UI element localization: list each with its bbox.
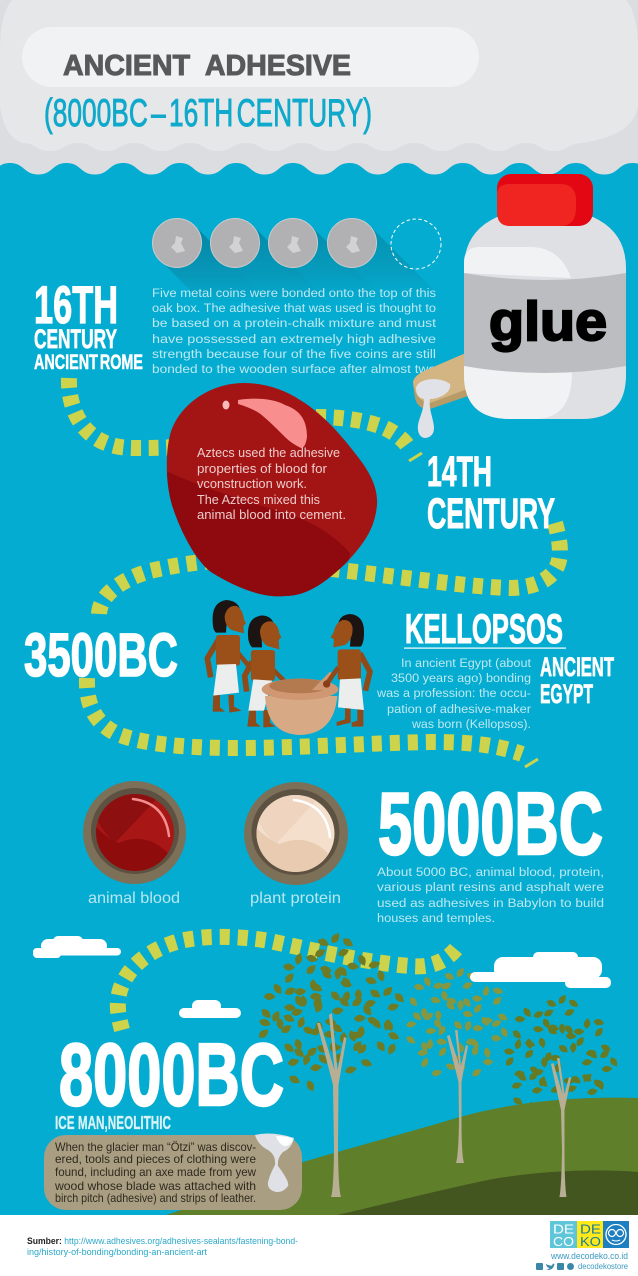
Kellopsos text: 3500 years ago) bonding: [391, 671, 531, 685]
blood text: vconstruction work.: [197, 477, 307, 491]
coin long shadows: [160, 226, 440, 303]
5000BC text: various plant resins and asphalt were: [377, 880, 604, 894]
Kellopsos text: was born (Kellopsos).: [411, 717, 531, 731]
blood drop: [160, 380, 385, 602]
Ice man sub-heading: ICE MAN,NEOLITHIC: [55, 1113, 171, 1133]
Ice man text box: found, including an axe made from yew: [55, 1166, 257, 1179]
Deco Deko logo: KO: [580, 1234, 601, 1249]
blood text: [197, 446, 346, 522]
subtitle: (8000BC – 16TH CENTURY): [44, 92, 372, 135]
glue drip in text box: [255, 1134, 294, 1192]
Ice man text box: When the glacier man “Ötzi” was discov-: [55, 1141, 256, 1154]
coins: [152, 218, 376, 268]
plant protein label: plant protein: [250, 890, 341, 907]
social handle: decodekostore: [578, 1261, 628, 1271]
mortar bowl: [262, 667, 338, 735]
Ice man text box: [44, 1135, 302, 1210]
Kellopsos text: In ancient Egypt (about: [401, 656, 532, 670]
5000BC text: About 5000 BC, animal blood, protein,: [377, 865, 604, 879]
timeline dash tips: [409, 453, 538, 767]
blood text: The Aztecs mixed this: [197, 493, 320, 507]
glue bottle: [464, 174, 626, 419]
timeline dashes: [69, 378, 560, 1030]
14th century heading: CENTURY: [427, 490, 555, 538]
Egyptian adhesive makers: [207, 600, 370, 735]
Deco Deko logo: DE: [580, 1222, 601, 1236]
figure: right: [331, 614, 370, 727]
blood text: Aztecs used the adhesive: [197, 446, 340, 460]
cloud: right: [470, 952, 611, 988]
coins text: [152, 286, 437, 376]
5000BC text: houses and temples.: [377, 911, 495, 925]
social icons: [536, 1263, 574, 1270]
coins text: bonded to the wooden surface after almost two: [152, 362, 436, 376]
coins text: strength because four of the five coins are still: [152, 347, 436, 361]
hills: [163, 1098, 638, 1216]
coins text: oak box. The adhesive that was used is thought to: [152, 301, 436, 315]
tree foliage: left: [251, 931, 408, 1096]
14th century heading: 14TH: [427, 448, 492, 496]
header band: [0, 0, 638, 174]
16th century heading: ANCIENT ROME: [34, 351, 143, 374]
source: ing/history-of-bonding/bonding-an-ancient-art: [27, 1246, 207, 1257]
Ice man text box: wood whose blade was attached with: [54, 1180, 256, 1193]
footer: [0, 1215, 638, 1276]
5000BC text: [377, 865, 604, 925]
coins text: be based on a protein-chalk mixture and must: [152, 316, 437, 330]
source: [27, 1235, 298, 1257]
Kellopsos text: was a profession: the occu-: [376, 686, 531, 700]
Ice man text box: ered, tools and pieces of clothing were: [55, 1153, 256, 1166]
tree trunks: [317, 1013, 571, 1197]
Ancient Egypt label: [540, 652, 614, 709]
Deco Deko logo: [550, 1221, 629, 1249]
16th century heading: CENTURY: [34, 324, 117, 354]
tree foliage: right: [497, 993, 623, 1117]
figure: middle: [245, 615, 284, 727]
3500BC heading: 3500BC: [24, 621, 178, 689]
8000BC heading: 8000BC: [59, 1025, 284, 1124]
cloud: left: [33, 936, 121, 958]
coins text: Five metal coins were bonded onto the top of this: [152, 286, 436, 300]
Ice man text box: birch pitch (adhesive) and strips of leather.: [55, 1192, 256, 1205]
Deco Deko logo: DE: [553, 1222, 574, 1236]
tree foliage: middle: [397, 966, 515, 1086]
spatula with glue: [413, 352, 480, 438]
animal blood label: animal blood: [88, 890, 180, 907]
figure: left: [207, 600, 252, 713]
Deco Deko logo: CO: [553, 1234, 574, 1249]
clouds: [33, 936, 611, 1018]
Ancient Egypt label: EGYPT: [540, 679, 593, 709]
16th century heading: 16TH: [34, 276, 118, 335]
Kellopsos text: pation of adhesive-maker: [387, 702, 531, 716]
coins text: have possessed an extremely high adhesive: [152, 332, 436, 346]
cloud: small: [179, 1000, 241, 1018]
title pill: [22, 27, 479, 87]
missing coin outline: [391, 219, 441, 269]
5000BC text: used as adhesives in Babylon to build: [377, 896, 604, 910]
blood text: properties of blood for: [197, 462, 327, 476]
plant protein capsule: [244, 782, 348, 885]
Kellopsos text: [376, 656, 532, 731]
animal blood capsule: [83, 781, 186, 884]
title: ANCIENT ADHESIVE: [63, 50, 351, 82]
source: Sumber: http://www.adhesives.org/adhesives-sealants/fastening-bond-: [27, 1235, 298, 1246]
14th century heading: [427, 448, 555, 538]
glue bottle: glue: [489, 290, 607, 352]
website: www.decodeko.co.id: [550, 1251, 628, 1262]
16th century heading: [34, 276, 143, 374]
blood text: animal blood into cement.: [197, 508, 346, 522]
